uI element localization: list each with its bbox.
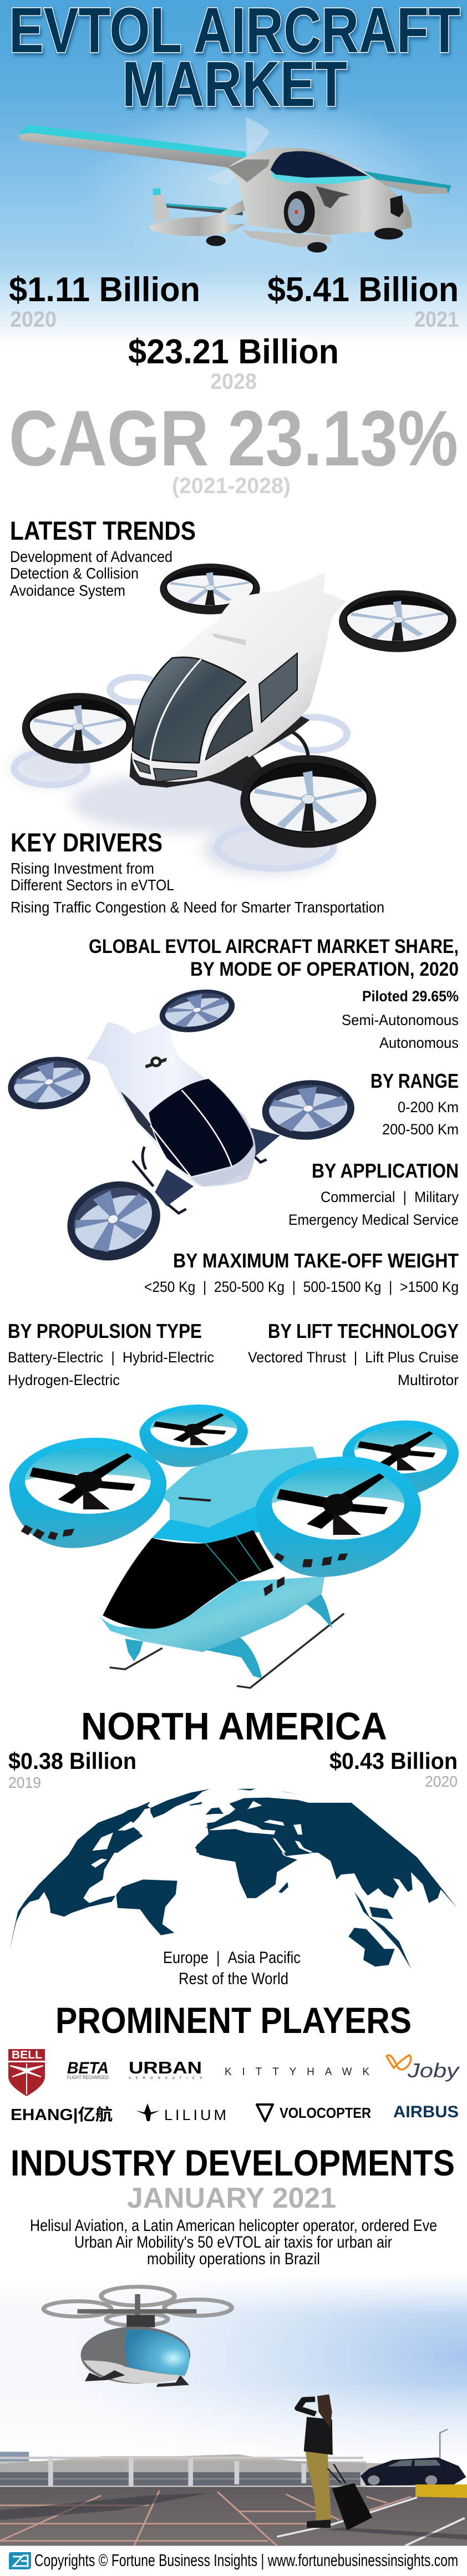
- illustration: navy evtol: [3, 983, 357, 1275]
- stat: 2020: 2020: [10, 307, 57, 332]
- star: [154, 1059, 159, 1064]
- wing root: [228, 159, 270, 182]
- logo: airbus: AIRBUS: [393, 2103, 459, 2121]
- skids: [133, 1147, 267, 1213]
- fan: rear right: [343, 1421, 459, 1497]
- logo: bell: [8, 2049, 45, 2096]
- regions list: Europe | Asia Pacific: [163, 1949, 301, 1967]
- date: JANUARY 2021: [127, 2182, 336, 2214]
- title: MARKET: [122, 49, 347, 120]
- title: [9, 0, 460, 120]
- lower hull: [130, 714, 309, 792]
- sky fade: [0, 2273, 467, 2315]
- wheels: [206, 191, 403, 252]
- footer logo: [9, 2552, 31, 2569]
- canopy: [271, 151, 368, 179]
- panel: mode of operation: Semi-Autonomous: [342, 1012, 459, 1028]
- roof vent: [211, 633, 246, 646]
- yellow barrier: [415, 2484, 467, 2498]
- window trim: [206, 1535, 261, 1582]
- fan: left: [3, 1050, 95, 1116]
- fan: rear left: [160, 564, 260, 615]
- ground shadow: [12, 748, 333, 875]
- logo: beta: FLIGHT RECHARGED: [67, 2075, 109, 2080]
- arctic canada: [70, 1804, 150, 1853]
- side window: [120, 1092, 156, 1141]
- tail boom: [149, 198, 248, 236]
- panel: by propulsion: Battery-Electric | Hybrid-Electric: [8, 1349, 214, 1366]
- stat: 2019: 2019: [8, 1774, 41, 1791]
- guard rail: [0, 2456, 367, 2496]
- canopy trim: [150, 1090, 232, 1177]
- regions list: Rest of the World: [179, 1970, 288, 1988]
- photo: airport scene: [0, 2273, 467, 2546]
- fuselage: [132, 572, 347, 782]
- greenland: [150, 1789, 210, 1818]
- illustration: flying car: [18, 117, 451, 252]
- parking lines: [0, 2491, 411, 2546]
- illustration: white evtol: [12, 564, 456, 875]
- fan: bottom: [54, 1167, 174, 1275]
- logo: urban: URBAN: [129, 2058, 202, 2077]
- north hemisphere detail: [70, 1789, 409, 1853]
- stat: 2020: [329, 1748, 458, 1790]
- wheel rim: [288, 199, 304, 226]
- australia: [348, 1928, 395, 1967]
- stat: 2020: $0.43 Billion: [329, 1748, 458, 1774]
- lamp post: [440, 2429, 448, 2458]
- fan: rear right: [339, 590, 456, 652]
- sky glow: [78, 94, 444, 283]
- stat: 2021: $5.41 Billion: [267, 271, 459, 309]
- shadow streaks: [0, 2493, 467, 2539]
- car: [361, 2457, 466, 2486]
- trees: [0, 2454, 387, 2473]
- canopy pillar: [150, 660, 201, 762]
- windshield: [103, 1530, 274, 1629]
- cyan stripe: [271, 170, 371, 184]
- tail fin: [153, 188, 170, 223]
- woman with luggage: [298, 2394, 372, 2531]
- building: [0, 2452, 29, 2462]
- nose: [191, 1153, 255, 1186]
- panel: latest trends: Avoidance System: [10, 582, 125, 599]
- fuselage: [87, 1022, 256, 1187]
- fan shadows: [14, 677, 347, 869]
- fan: front left: [9, 1438, 166, 1548]
- side window: [259, 653, 297, 722]
- stat: 2020: $1.11 Billion: [9, 271, 200, 309]
- stat: 2028: [128, 333, 339, 394]
- panel: key drivers: KEY DRIVERS: [11, 828, 163, 857]
- stat: 2019: [8, 1748, 136, 1791]
- britain: [206, 1807, 224, 1815]
- legs: [125, 1591, 332, 1679]
- panel: by range: 200-500 Km: [382, 1121, 459, 1138]
- stat: 2021: 2021: [414, 307, 459, 332]
- main landmasses: [9, 1802, 457, 1969]
- panel: latest trends: LATEST TRENDS: [10, 516, 196, 545]
- world map: [9, 1789, 457, 1969]
- stat: 2020: 2020: [425, 1773, 458, 1790]
- panel: latest trends: Detection & Collision: [10, 565, 139, 582]
- sky: [0, 2274, 467, 2468]
- lower hull: [100, 1576, 324, 1652]
- panel: sky header: [0, 0, 467, 347]
- hull top: [161, 1447, 343, 1527]
- horizon fade: [0, 2382, 467, 2468]
- fan: front left: [22, 693, 134, 764]
- fuselage: [228, 148, 412, 235]
- stat: 2019: $0.38 Billion: [8, 1748, 136, 1774]
- panel: by range: [370, 1069, 459, 1138]
- fan: top: [155, 983, 239, 1038]
- panel: mode of operation: Piloted 29.65%: [362, 988, 459, 1005]
- fan: right: [260, 1077, 357, 1143]
- logo: ehang: EHANG|亿航: [11, 2106, 113, 2124]
- logo: urban: AERONAUTICS: [129, 2077, 202, 2080]
- logo: volocopter: VOLOCOPTER: [280, 2105, 371, 2121]
- logo: kittyhawk: KITTYHAWK: [225, 2066, 369, 2078]
- stat: 2020: [9, 271, 200, 332]
- eurasia top: [196, 1798, 409, 1853]
- panel: mode of operation: [89, 936, 459, 1051]
- white lines: [277, 2497, 465, 2546]
- logo: lilium: [136, 2103, 226, 2123]
- hudson bay and lakes: [91, 1833, 113, 1868]
- fan: front right: [240, 755, 376, 848]
- stat: 2028: 2028: [210, 369, 257, 394]
- stat: 2021: [267, 271, 459, 332]
- stat: 2028: $23.21 Billion: [128, 333, 339, 371]
- flying pod: [44, 2287, 232, 2387]
- heading: north america: NORTH AMERICA: [81, 1705, 387, 1748]
- ground: [0, 2487, 467, 2546]
- panel: by lift: Multirotor: [398, 1372, 459, 1388]
- panel: mode of operation: Autonomous: [379, 1035, 459, 1051]
- logo: bell: BELL: [12, 2049, 42, 2061]
- canopy: [133, 657, 246, 763]
- right wing: [362, 171, 451, 194]
- panel: latest trends: Development of Advanced: [10, 548, 172, 565]
- eurasia: [206, 1803, 457, 1908]
- logo: joby: Joby: [407, 2059, 460, 2082]
- nose panels: [154, 768, 196, 782]
- fan: rear center: [139, 1404, 248, 1467]
- regions list: [163, 1949, 301, 1988]
- panel: by application: [288, 1159, 459, 1228]
- development description: [30, 2217, 437, 2268]
- indonesia: [354, 1892, 411, 1969]
- svalbard: [237, 1789, 348, 1811]
- skids: [110, 1614, 344, 1688]
- north america: [9, 1802, 150, 1950]
- africa: [195, 1833, 297, 1898]
- development description: Urban Air Mobility's 50 eVTOL air taxis for urban air: [74, 2233, 392, 2252]
- heading: prominent players: PROMINENT PLAYERS: [55, 2000, 412, 2041]
- panel: by lift: [248, 1320, 459, 1388]
- panel: key drivers: Rising Investment from: [11, 860, 154, 877]
- star roundel: [145, 1057, 167, 1068]
- arms: [155, 1127, 280, 1206]
- checker marks: [21, 1497, 348, 1596]
- panel: by propulsion: Hydrogen-Electric: [8, 1372, 120, 1388]
- left wing: [18, 125, 247, 168]
- logo: joby: [387, 2055, 460, 2082]
- rear wing: [165, 204, 243, 215]
- panel: latest trends: [10, 516, 196, 599]
- panel: by application: Commercial | Military: [321, 1189, 459, 1205]
- inland seas: [92, 1801, 313, 1853]
- panel: by propulsion: BY PROPULSION TYPE: [8, 1320, 202, 1342]
- propeller blur: [206, 117, 270, 185]
- lower pod: [243, 230, 331, 247]
- collar: [152, 1506, 262, 1543]
- south america: [116, 1879, 177, 1935]
- panel: by range: 0-200 Km: [398, 1099, 459, 1115]
- canopy: [149, 1079, 253, 1177]
- development description: mobility operations in Brazil: [147, 2250, 320, 2268]
- logo: lilium: LILIUM: [164, 2107, 226, 2123]
- headlight and grille: [316, 186, 350, 208]
- madagascar: [278, 1882, 288, 1893]
- fan arm: [209, 756, 259, 793]
- logo: beta: BETA: [67, 2059, 109, 2077]
- fan: front right: [255, 1457, 421, 1577]
- iceland: [189, 1802, 202, 1806]
- panel: key drivers: Different Sectors in eVTOL: [11, 876, 174, 894]
- panel: key drivers: [11, 828, 384, 916]
- panel: by propulsion: [8, 1320, 214, 1388]
- illustration: cyan evtol: [9, 1404, 459, 1688]
- panel: by weight: [144, 1249, 459, 1295]
- landing strut: [291, 731, 308, 757]
- stat: CAGR: (2021-2028): [172, 474, 291, 498]
- panel: key drivers: Rising Traffic Congestion & Need for Smarter Transportation: [11, 899, 384, 916]
